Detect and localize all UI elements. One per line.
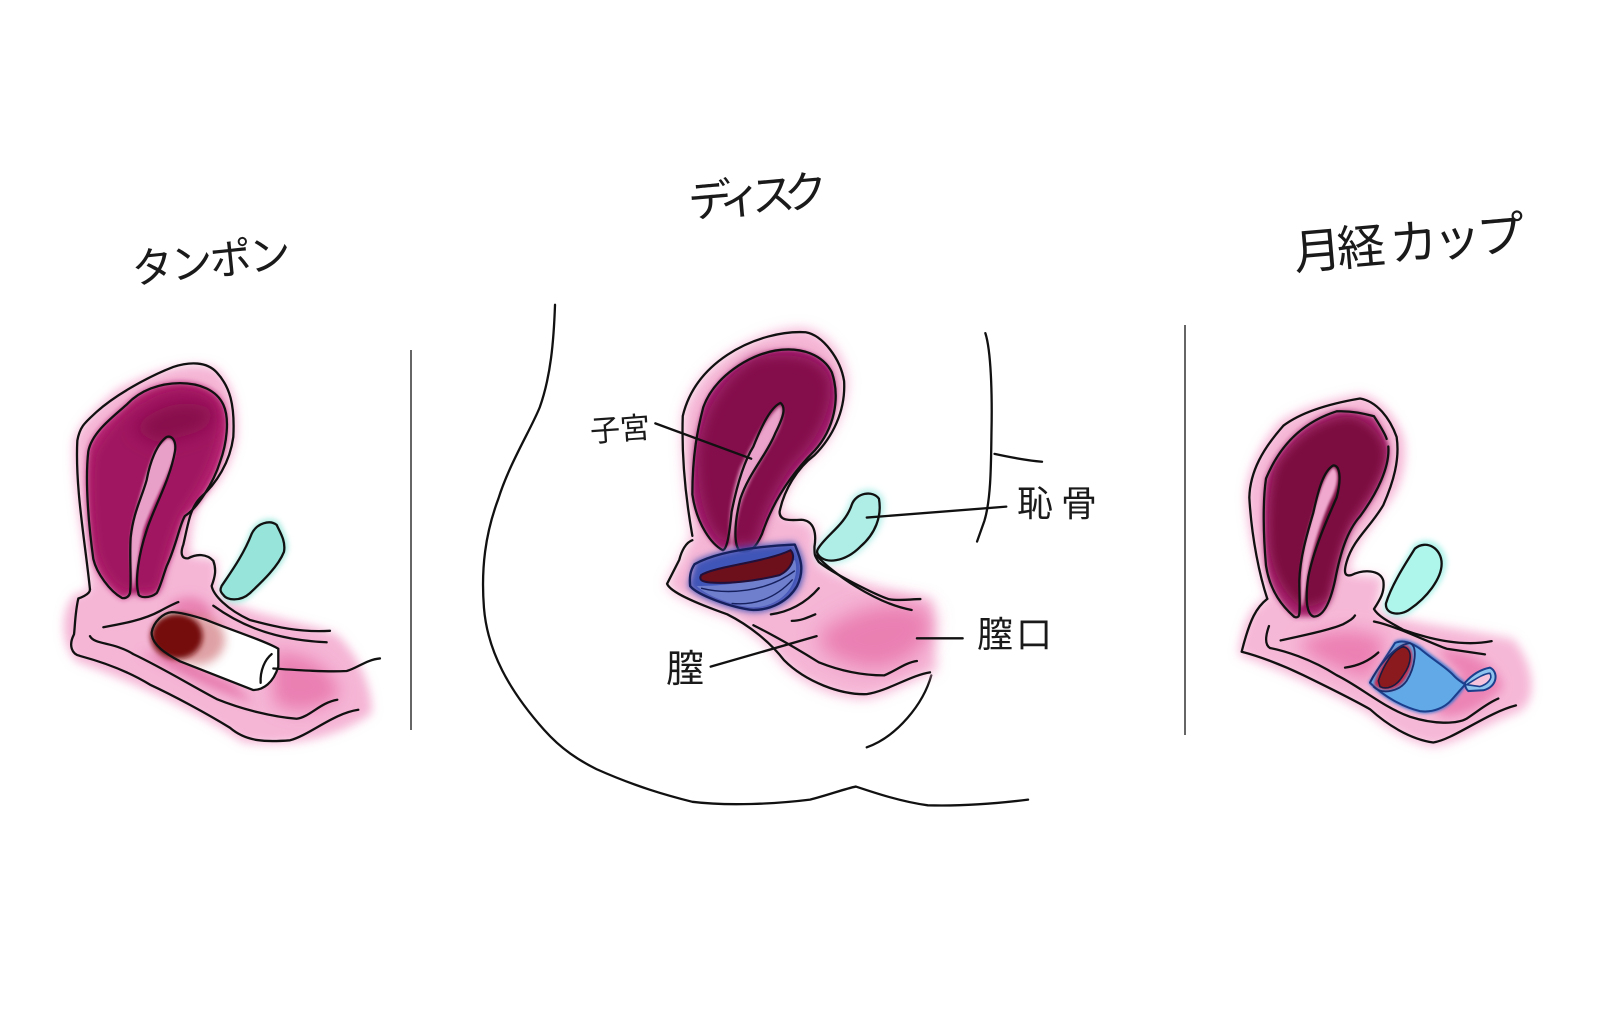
blood in cup — [1374, 644, 1413, 690]
outline: tampon panel — [71, 363, 358, 741]
tissue colouring: cup panel — [1238, 395, 1532, 746]
pubic bone: cup panel — [1383, 540, 1447, 617]
panel: tampon — [64, 363, 380, 744]
panel: disc — [483, 305, 1042, 805]
uterus: cup panel — [1264, 411, 1388, 617]
outline: disc panel — [667, 332, 930, 694]
menstrual cup — [1368, 640, 1496, 713]
tissue colouring: tampon panel — [64, 365, 372, 744]
pubic bone: disc panel — [814, 489, 884, 564]
heading: disc: ディスク — [686, 167, 830, 228]
body silhouette outline — [483, 305, 1042, 805]
divider line right — [1184, 325, 1186, 735]
panel: menstrual cup — [1238, 395, 1532, 746]
tampon — [151, 612, 380, 690]
pubic bone: tampon panel — [220, 519, 288, 603]
cup pull loop — [1465, 668, 1496, 691]
heading: menstrual cup: 月経 カップ — [1291, 208, 1527, 281]
divider line left — [410, 350, 412, 730]
label: vaginal opening: 膣口 — [977, 614, 1052, 655]
label: vagina: 膣 — [666, 649, 704, 691]
absorbed blood — [151, 613, 225, 665]
heading: tampon: タンポン — [129, 230, 293, 293]
leader lines — [655, 423, 1006, 667]
blood in disc — [700, 550, 793, 583]
uterus: tampon panel — [87, 383, 227, 598]
outline: cup panel — [1242, 398, 1516, 742]
menstrual disc — [688, 542, 804, 612]
label: uterus: 子宮 — [589, 412, 651, 449]
tissue colouring: disc panel — [666, 328, 937, 699]
label: pubic bone: 恥骨 — [1017, 483, 1097, 524]
uterus: disc panel — [692, 349, 836, 552]
